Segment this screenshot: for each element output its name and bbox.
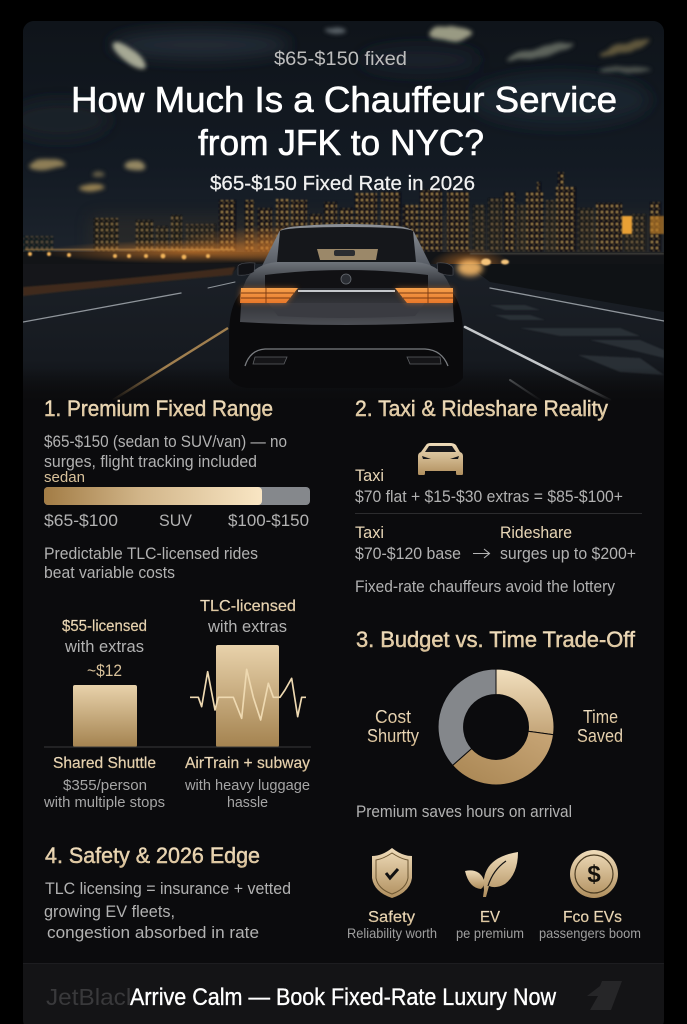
hero image: night road with car and skyline [10,21,664,401]
label: sedan: sedan [44,469,85,486]
column labels: shuttle top [62,618,147,680]
text: safety description: growing EV fleets, [44,902,175,921]
icon captions: Reliability worth [347,925,437,941]
text: avoid the lottery: Fixed-rate chauffeurs avoid the lottery [355,577,615,596]
donut label: cost: Shurtty [367,726,419,746]
caption: shared shuttle: $355/person [63,777,147,794]
text: range description [44,432,287,471]
footer logo [587,981,622,1010]
column labels: AirTrain top: TLC-licensed [200,598,296,615]
column labels: AirTrain top [200,598,296,636]
pulse line [190,669,306,720]
donut label: time: Saved [577,726,623,746]
title: from JFK to NYC? [198,122,484,163]
text: taxi base: $70-$120 base [355,544,461,563]
footer call to action: Arrive Calm — Book Fixed-Rate Luxury Now [130,984,557,1011]
icon: dollar coin: $ [587,861,601,888]
caption: AirTrain + subway: with heavy luggage [184,777,310,794]
icon captions: Safety [368,909,415,926]
donut label: cost: Cost [375,707,411,727]
text: range description: $65-$150 (sedan to SUV/van) — no [44,432,287,451]
car [229,224,463,388]
text: rideshare surges: surges up to $200+ [500,544,636,563]
icon captions: Fco EVs [563,909,622,926]
footer bar [23,963,664,1024]
heading: section 4: 4. Safety & 2026 Edge [45,843,260,868]
caption: shared shuttle [43,755,165,811]
panel: 4. Safety & 2026 Edge [44,843,291,942]
text: taxi base: Taxi [355,523,384,542]
text: safety description [44,879,291,942]
text: taxi flat fare: $70 flat + $15-$30 extras = $85-$100+ [355,487,623,506]
icon captions: passengers boom [539,925,641,941]
bar labels: SUV [159,511,193,530]
column labels: shuttle top: ~$12 [87,661,122,680]
arrow [473,549,490,558]
text: predictable rides [44,544,258,582]
icon: dollar coin [570,850,618,898]
heading: section 2: 2. Taxi & Rideshare Reality [355,396,608,421]
eyebrow: price tag: $65-$150 fixed [274,49,407,70]
text: predictable rides: Predictable TLC-licensed rides [44,544,258,563]
icon: leaf [465,852,518,897]
heading: section 3: 3. Budget vs. Time Trade-Off [356,627,636,652]
subtitle: $65-$150 Fixed Rate in 2026 [210,173,475,195]
title [71,79,617,163]
icon: shield [372,848,412,898]
column labels: shuttle top: $55-licensed [62,618,147,635]
column labels: AirTrain top: with extras [207,617,287,636]
donut chart [438,669,554,785]
icon captions: pe premium [456,925,524,941]
text: taxi flat fare: Taxi [355,466,384,485]
caption: AirTrain + subway: AirTrain + subway [185,755,310,772]
caption: shared shuttle: with multiple stops [43,794,165,811]
text: premium saves hours: Premium saves hours on arrival [356,802,572,821]
text: safety description: TLC licensing = insurance + vetted [45,879,291,898]
price range bar [44,487,310,505]
bar: AirTrain + subway [216,645,279,747]
column labels: shuttle top: with extras [64,637,144,656]
text: range description: surges, flight tracking included [44,452,257,471]
icon: taxi car [418,443,463,475]
text: rideshare surges [500,523,636,563]
text: safety description: congestion absorbed in rate [47,923,259,942]
text: rideshare surges: Rideshare [500,523,572,542]
caption: AirTrain + subway [184,755,310,811]
donut label: time [577,707,623,746]
title: How Much Is a Chauffeur Service [71,79,617,120]
text: taxi flat fare [355,466,623,506]
donut label: time: Time [583,707,618,727]
caption: AirTrain + subway: hassle [227,794,268,811]
bar labels: $65-$100 [44,511,118,530]
panel: 2. Taxi & Rideshare Reality [355,396,642,596]
bar: shared shuttle [73,685,137,747]
bar labels [44,511,309,530]
caption: shared shuttle: Shared Shuttle [53,755,156,772]
text: predictable rides: beat variable costs [44,563,175,582]
text: taxi base [355,523,461,563]
bar labels: $100-$150 [228,511,309,530]
donut label: cost [367,707,419,746]
icon captions: EV [480,909,500,926]
icon captions [347,909,641,941]
footer brand: JetBlack [46,984,139,1010]
panel: 3. Budget vs. Time Trade-Off [356,627,636,821]
heading: section 1: 1. Premium Fixed Range [44,396,273,421]
bar chart: shuttle vs AirTrain [43,598,311,811]
panel: 1. Premium Fixed Range [43,396,311,811]
